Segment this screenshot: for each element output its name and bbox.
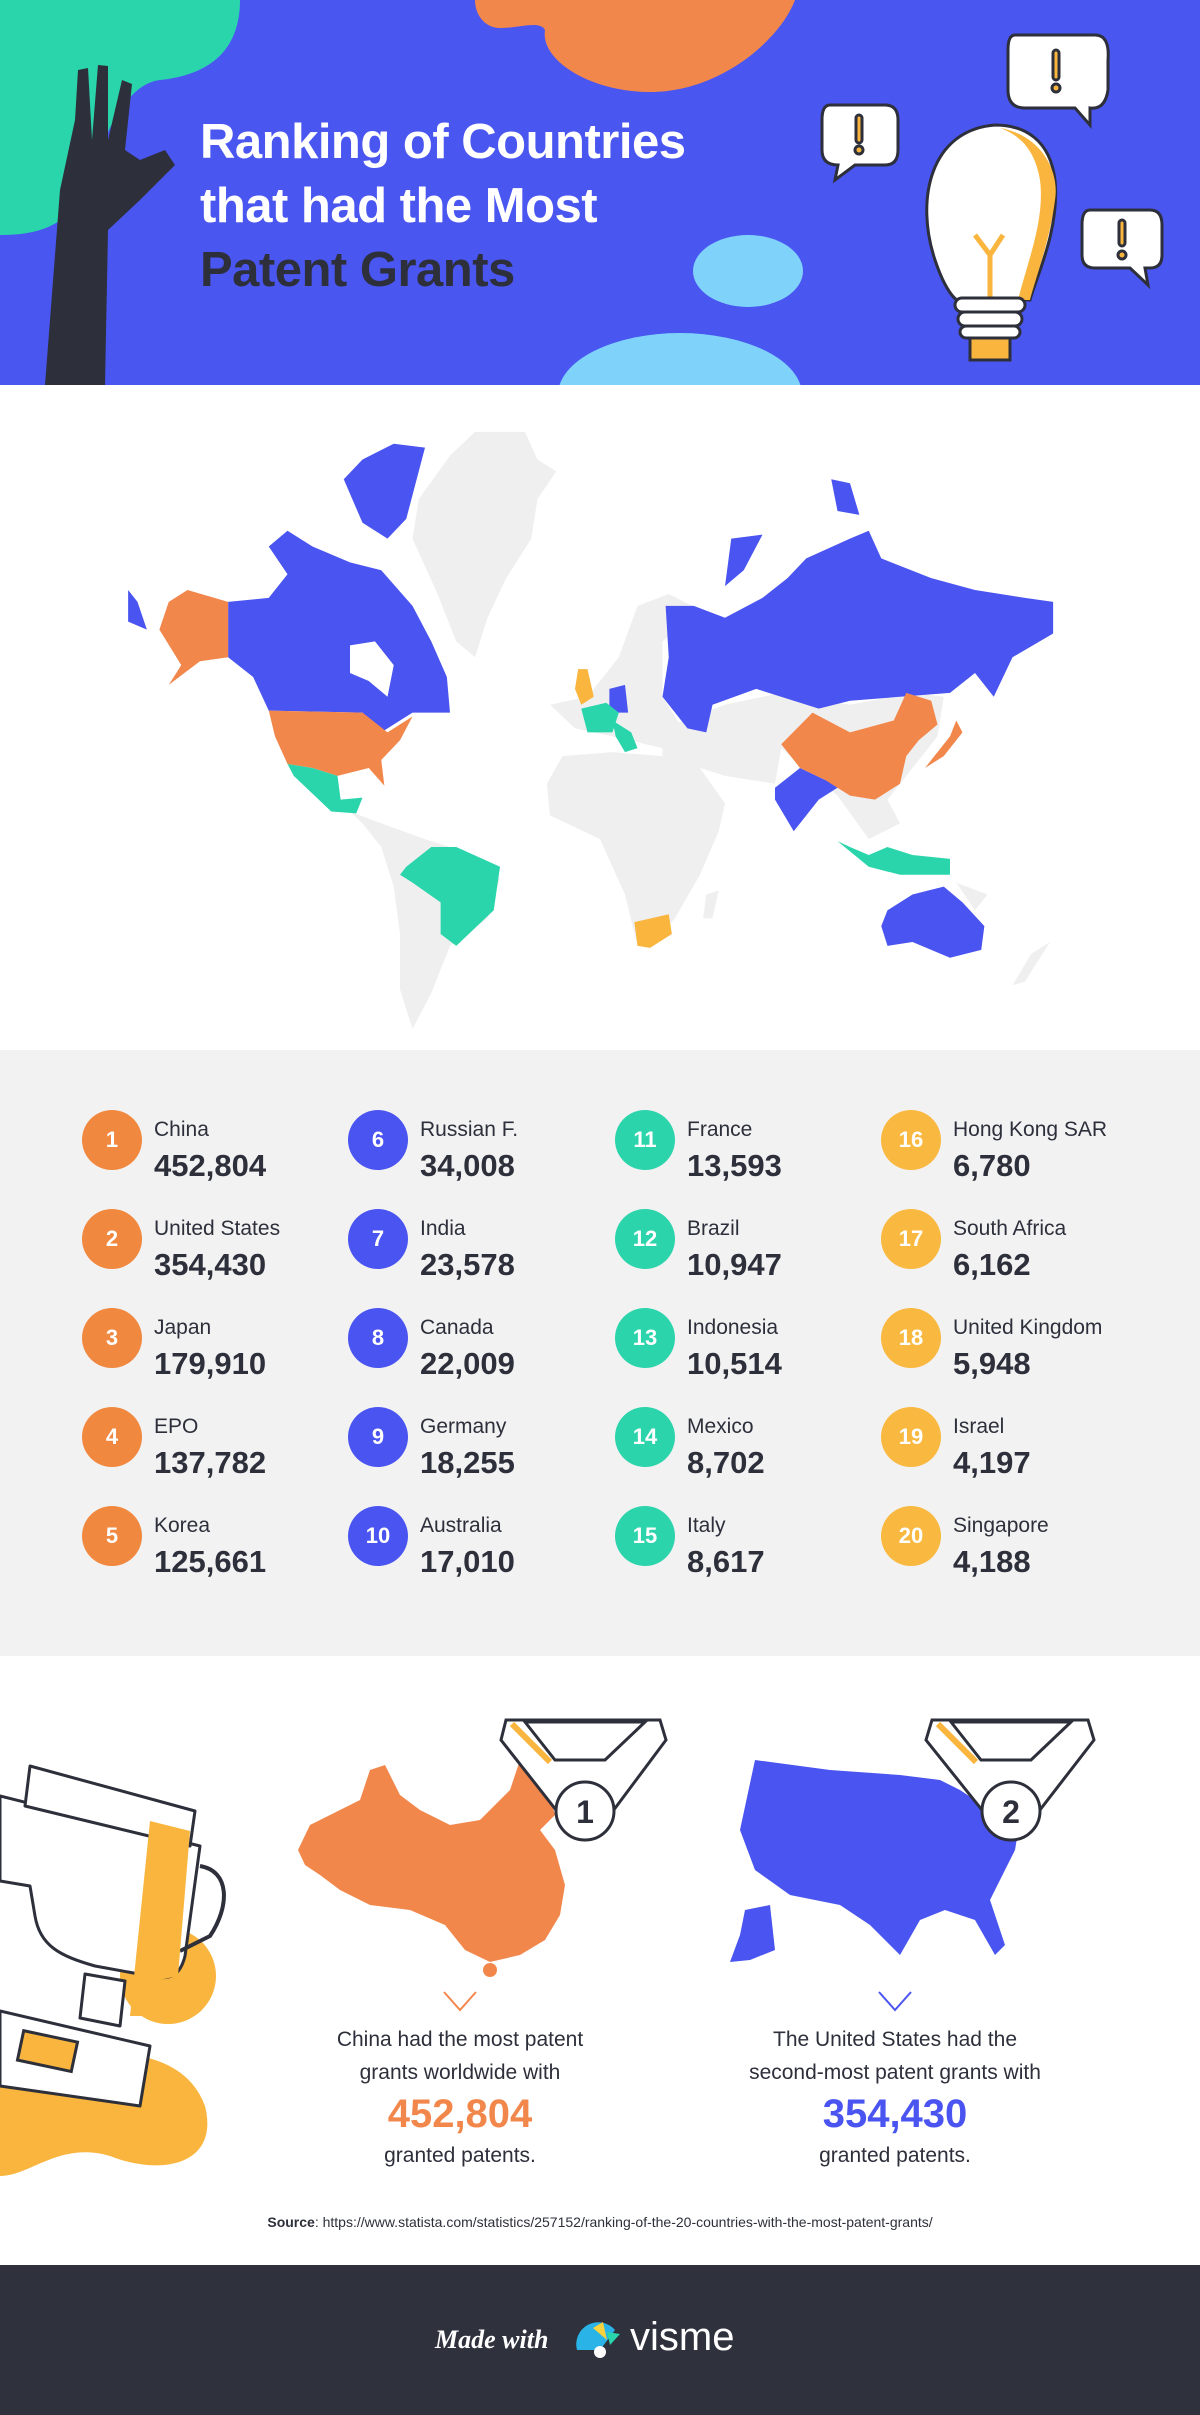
- column 3: France: [687, 1118, 752, 1141]
- icon: trophy: [0, 1764, 226, 2176]
- medal 1: [501, 1720, 666, 1840]
- panel: ranking table: Germany: [420, 1415, 506, 1438]
- caption: granted patents.: [819, 2144, 971, 2167]
- column 3: 11: [633, 1127, 657, 1152]
- chevron: [443, 1991, 477, 2012]
- title: Patent Grants: [200, 243, 515, 297]
- medal 2: 2: [1002, 1794, 1020, 1830]
- icon: light bulb: [927, 125, 1056, 360]
- panel: ranking table: 4,188: [953, 1544, 1031, 1579]
- source: Source: https://www.statista.com/statistics/257152/ranking-of-the-20-countries-with-the-most-patent-grants/: [267, 2214, 933, 2230]
- panel: ranking table: Korea: [154, 1514, 210, 1537]
- panel: ranking table: Indonesia: [687, 1316, 778, 1339]
- blob: light blue bottom: [558, 333, 802, 457]
- column 3: [615, 1110, 782, 1183]
- panel: ranking table: 4,197: [953, 1445, 1031, 1480]
- panel: ranking table: 8,702: [687, 1445, 765, 1480]
- panel: ranking table: 5: [106, 1523, 118, 1548]
- panel: ranking table: 18: [899, 1325, 923, 1350]
- column 2: [348, 1110, 518, 1183]
- column 3: 13,593: [687, 1148, 782, 1183]
- column 1: China: [154, 1118, 209, 1141]
- header: [0, 0, 1200, 385]
- blob: teal: [0, 0, 240, 235]
- panel: ranking table: 354,430: [154, 1247, 266, 1282]
- panel: ranking table: EPO: [154, 1415, 198, 1438]
- panel: US highlight: [730, 1718, 1096, 2167]
- panel: ranking table: 5,948: [953, 1346, 1031, 1381]
- panel: ranking table: Japan: [154, 1316, 211, 1339]
- panel: ranking table: 23,578: [420, 1247, 515, 1282]
- footer logo: visme: [630, 2315, 734, 2359]
- panel: ranking table: Italy: [687, 1514, 726, 1537]
- panel: ranking table: 2: [106, 1226, 118, 1251]
- panel: ranking table: 22,009: [420, 1346, 515, 1381]
- map: China: [298, 1718, 668, 1977]
- panel: ranking table: 125,661: [154, 1544, 266, 1579]
- panel: ranking table: 4: [106, 1424, 118, 1449]
- panel: ranking table: 10: [366, 1523, 390, 1548]
- panel: ranking table: 6,162: [953, 1247, 1031, 1282]
- panel: ranking table: 13: [633, 1325, 657, 1350]
- column 2: Russian F.: [420, 1118, 518, 1141]
- panel: ranking table: Mexico: [687, 1415, 754, 1438]
- caption: China had the most patent: [337, 2028, 583, 2051]
- panel: ranking table: 10,514: [687, 1346, 782, 1381]
- caption: 354,430: [823, 2092, 967, 2136]
- map: USA: [730, 1718, 1096, 1962]
- caption: grants worldwide with: [360, 2061, 560, 2084]
- panel: China highlight: [298, 1718, 668, 2167]
- column 1: 1: [106, 1127, 118, 1152]
- panel: ranking table: 20: [899, 1523, 923, 1548]
- panel: ranking table: 137,782: [154, 1445, 266, 1480]
- column 2: 6: [372, 1127, 384, 1152]
- panel: ranking table: Canada: [420, 1316, 494, 1339]
- panel: ranking table: 9: [372, 1424, 384, 1449]
- panel: ranking table: 7: [372, 1226, 384, 1251]
- caption: second-most patent grants with: [749, 2061, 1041, 2084]
- panel: ranking table: 15: [633, 1523, 657, 1548]
- column 2: 34,008: [420, 1148, 515, 1183]
- panel: ranking table: Australia: [420, 1514, 502, 1537]
- panel: ranking table: 8: [372, 1325, 384, 1350]
- blob: orange: [475, 0, 795, 92]
- panel: ranking table: United Kingdom: [953, 1316, 1102, 1339]
- footer logo: [434, 2315, 734, 2359]
- panel: ranking table: 17: [899, 1226, 923, 1251]
- column 4: 6,780: [953, 1148, 1031, 1183]
- column 4: Hong Kong SAR: [953, 1118, 1107, 1141]
- icon: speech bubbles: [822, 35, 1162, 285]
- panel: ranking table: 17,010: [420, 1544, 515, 1579]
- panel: ranking table: 3: [106, 1325, 118, 1350]
- icon: hand: [45, 65, 175, 385]
- column 1: [82, 1110, 266, 1183]
- caption: [337, 2028, 584, 2167]
- panel: ranking table: India: [420, 1217, 466, 1240]
- column 4: [881, 1110, 1107, 1183]
- panel: ranking table: [0, 1050, 1200, 1656]
- caption: [749, 2028, 1041, 2167]
- panel: ranking table: Singapore: [953, 1514, 1049, 1537]
- panel: ranking table: 18,255: [420, 1445, 515, 1480]
- panel: ranking table: 14: [633, 1424, 657, 1449]
- title: Ranking of Countries: [200, 115, 685, 169]
- caption: The United States had the: [773, 2028, 1017, 2051]
- column 1: 452,804: [154, 1148, 266, 1183]
- title: that had the Most: [200, 179, 597, 233]
- panel: ranking table: 10,947: [687, 1247, 782, 1282]
- panel: ranking table: Israel: [953, 1415, 1004, 1438]
- caption: granted patents.: [384, 2144, 536, 2167]
- caption: 452,804: [388, 2092, 532, 2136]
- panel: ranking table: 8,617: [687, 1544, 765, 1579]
- panel: ranking table: United States: [154, 1217, 280, 1240]
- title: [200, 115, 685, 297]
- panel: ranking table: 179,910: [154, 1346, 266, 1381]
- footer: [0, 2265, 1200, 2415]
- blob: light blue circle: [693, 235, 803, 307]
- panel: ranking table: Brazil: [687, 1217, 740, 1240]
- medal 1: 1: [576, 1794, 594, 1830]
- panel: ranking table: 19: [899, 1424, 923, 1449]
- panel: ranking table: South Africa: [953, 1217, 1066, 1240]
- column 4: 16: [899, 1127, 923, 1152]
- chevron: [878, 1991, 912, 2012]
- footer logo: Made with: [435, 2325, 548, 2354]
- panel: ranking table: 12: [633, 1226, 657, 1251]
- world map: [128, 432, 1054, 1028]
- medal 2: [926, 1720, 1094, 1840]
